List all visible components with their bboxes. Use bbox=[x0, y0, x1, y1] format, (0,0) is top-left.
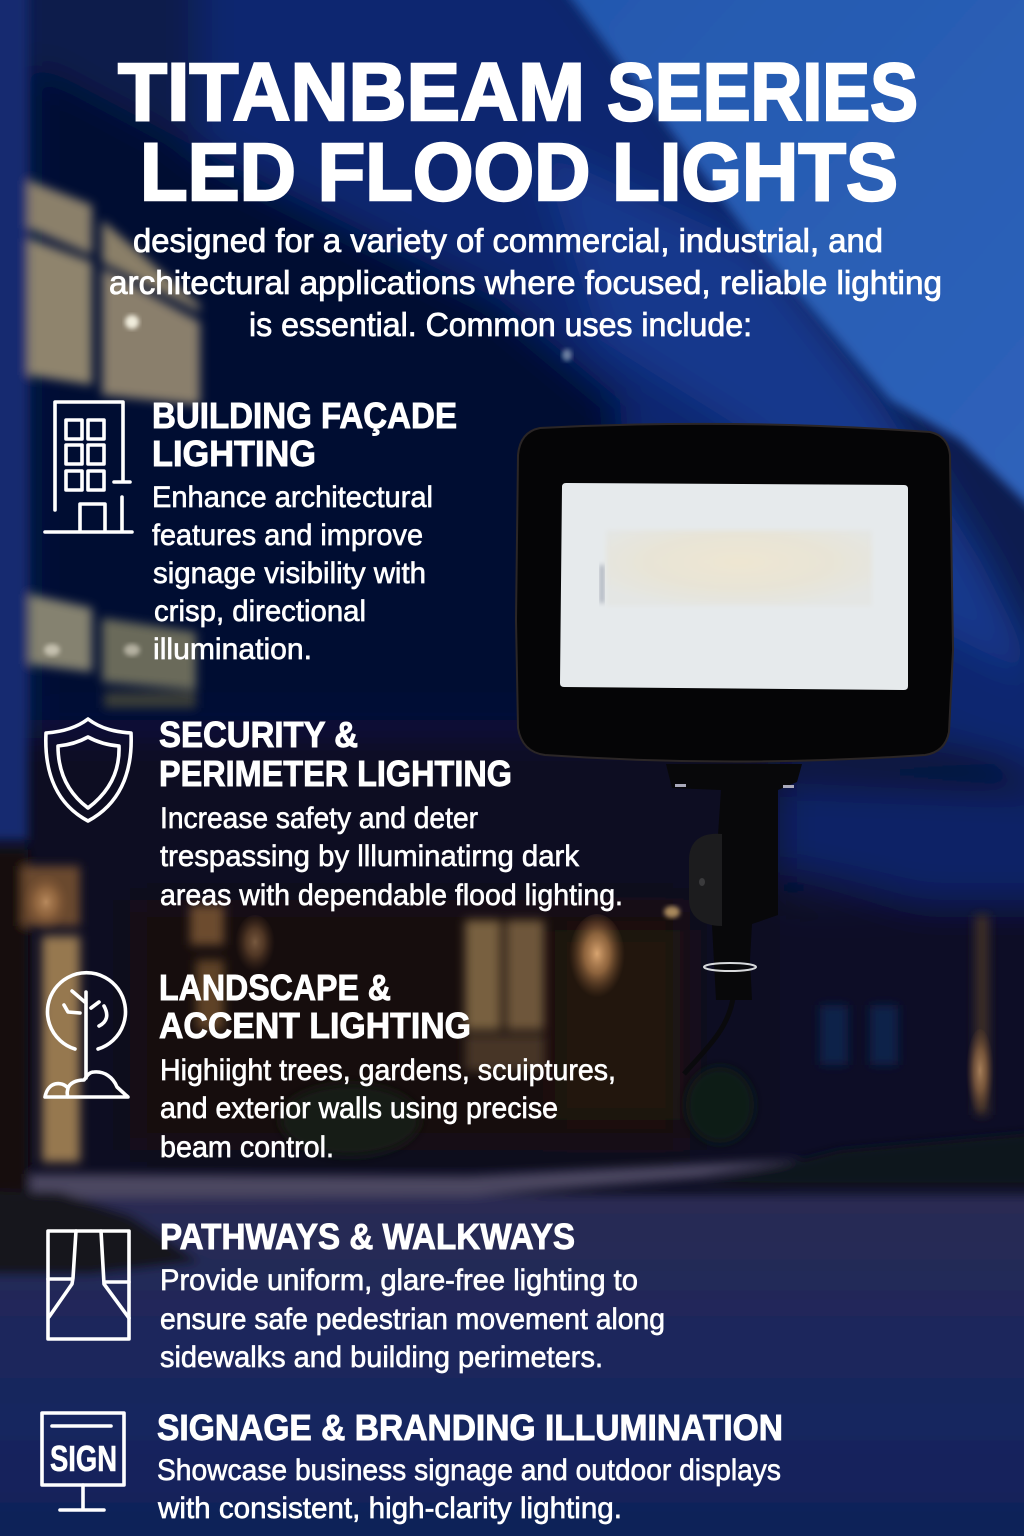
item: security and perimeter lighting bbox=[46, 714, 623, 912]
description bbox=[160, 1264, 665, 1374]
description: sidewalks and building perimeters. bbox=[160, 1341, 603, 1374]
sky bbox=[542, 0, 1024, 540]
description: beam control. bbox=[160, 1131, 334, 1164]
title: TITANBEAM bbox=[118, 47, 585, 138]
heading: SECURITY & bbox=[159, 714, 358, 755]
heading: PERIMETER LIGHTING bbox=[159, 753, 512, 794]
description: illumination. bbox=[153, 633, 312, 666]
item: landscape and accent lighting bbox=[45, 967, 616, 1164]
intro text bbox=[109, 222, 942, 343]
lower windows bbox=[29, 594, 92, 672]
description: Showcase business signage and outdoor displays bbox=[157, 1454, 781, 1487]
icon: tree bbox=[45, 973, 128, 1097]
item: building facade lighting bbox=[45, 395, 457, 666]
description: Enhance architectural bbox=[152, 481, 433, 514]
heading bbox=[152, 395, 457, 474]
description: features and improve bbox=[152, 519, 423, 552]
item: pathways and walkways bbox=[48, 1216, 665, 1374]
icon: shield bbox=[46, 719, 131, 821]
description: Highiight trees, gardens, scuiptures, bbox=[160, 1054, 616, 1087]
intro text: architectural applications where focused, reliable lighting bbox=[109, 264, 942, 301]
icon: building bbox=[45, 402, 132, 532]
icon: path bbox=[48, 1231, 129, 1339]
left strip bbox=[0, 0, 28, 840]
icon: sign bbox=[42, 1413, 124, 1510]
description: trespassing by llluminatirng dark bbox=[160, 840, 580, 873]
heading: SIGNAGE & BRANDING ILLUMINATION bbox=[157, 1407, 783, 1448]
title: LED FLOOD LIGHTS bbox=[140, 127, 898, 218]
flood light lens bbox=[560, 483, 908, 690]
lit interiors bbox=[0, 850, 28, 1190]
title: SEERIES bbox=[607, 47, 918, 138]
item: signage and branding illumination bbox=[42, 1407, 783, 1525]
description: ensure safe pedestrian movement along bbox=[160, 1303, 665, 1336]
description bbox=[157, 1454, 781, 1525]
description bbox=[160, 802, 623, 912]
description bbox=[160, 1054, 616, 1164]
heading: ACCENT LIGHTING bbox=[159, 1005, 471, 1046]
heading: BUILDING FAÇADE bbox=[152, 395, 457, 436]
heading: PATHWAYS & WALKWAYS bbox=[160, 1216, 575, 1257]
description: with consistent, high-clarity lighting. bbox=[157, 1492, 622, 1525]
description: crisp, directional bbox=[154, 595, 366, 628]
description: signage visibility with bbox=[153, 557, 426, 590]
intro text: is essential. Common uses include: bbox=[249, 306, 752, 343]
soft facade masses bbox=[0, 0, 1024, 1210]
title bbox=[118, 47, 918, 218]
flood light housing bbox=[516, 424, 953, 762]
heading: LIGHTING bbox=[152, 433, 316, 474]
description: and exterior walls using precise bbox=[160, 1092, 558, 1125]
upper windows bbox=[28, 180, 92, 255]
heading bbox=[159, 714, 512, 794]
heading: LANDSCAPE & bbox=[159, 967, 391, 1008]
intro text: designed for a variety of commercial, industrial, and bbox=[133, 222, 883, 259]
description bbox=[152, 481, 433, 666]
product: LED flood light bbox=[516, 424, 953, 1074]
flood light mounting bracket and cable bbox=[666, 764, 802, 1074]
description: Provide uniform, glare-free lighting to bbox=[160, 1264, 638, 1297]
ground bbox=[0, 1195, 1024, 1536]
heading bbox=[159, 967, 471, 1046]
description: Increase safety and deter bbox=[160, 802, 478, 835]
icon: sign: SIGN bbox=[50, 1438, 117, 1479]
description: areas with dependable flood lighting. bbox=[160, 879, 623, 912]
